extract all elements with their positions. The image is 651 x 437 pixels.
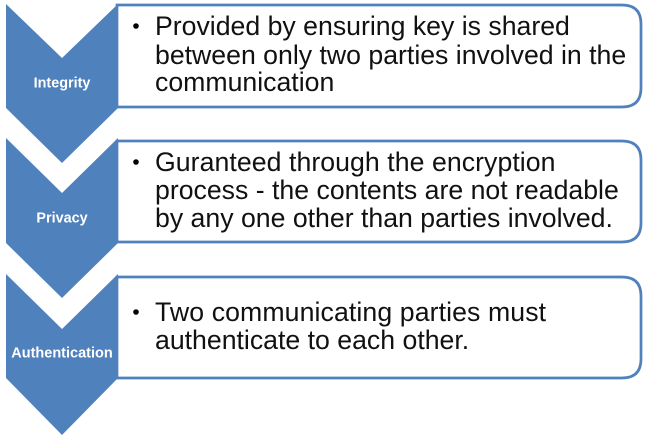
panel: authentication (6, 274, 641, 435)
chevron: integrity (6, 4, 118, 163)
chevron: privacy: Privacy (36, 210, 88, 226)
text box: integrity: communication (155, 67, 334, 97)
text box: privacy: Guranteed through the encryption (155, 147, 556, 177)
text box: authentication (117, 277, 641, 378)
chevron: authentication (6, 274, 118, 435)
text box: privacy (117, 141, 641, 242)
chevron: privacy (6, 138, 118, 298)
text box: privacy: process - the contents are not readable (155, 175, 619, 205)
text box: authentication: authenticate to each other. (155, 325, 469, 355)
chevron: authentication: Authentication (11, 346, 113, 362)
text box: integrity: between only two parties involved in the (155, 40, 626, 70)
text box: integrity (117, 5, 641, 107)
panel: integrity (6, 4, 641, 163)
chevron: integrity: Integrity (34, 76, 90, 92)
text box: privacy: by any one other than parties involved. (155, 203, 613, 233)
text box: authentication: Two communicating parties must (155, 297, 547, 327)
panel: privacy (6, 138, 641, 298)
text box: integrity: Provided by ensuring key is shared (155, 11, 570, 41)
